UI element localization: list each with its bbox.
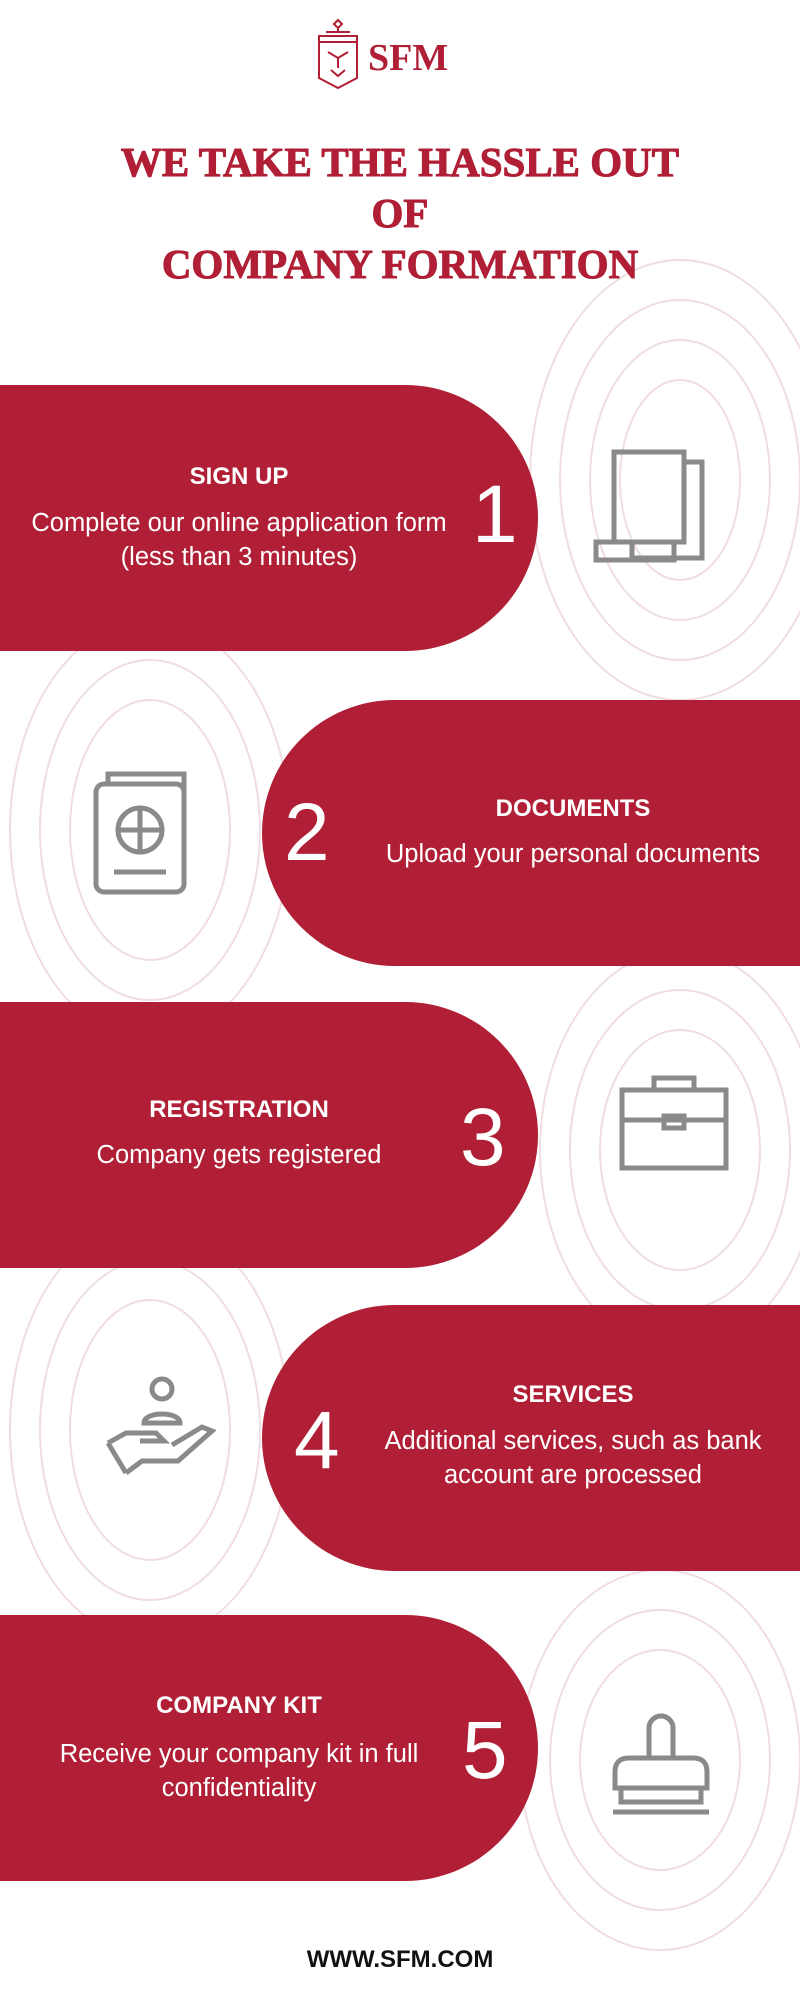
text: Upload your personal documents xyxy=(386,840,760,868)
text: Additional services, such as bank xyxy=(384,1427,762,1455)
text: Receive your company kit in full xyxy=(60,1740,418,1768)
text: confidentiality xyxy=(162,1774,316,1802)
text xyxy=(384,1427,762,1489)
number: 2 xyxy=(284,787,330,878)
icon: lion shield xyxy=(318,18,358,90)
logo xyxy=(318,18,448,90)
title xyxy=(120,139,679,287)
text: (less than 3 minutes) xyxy=(121,543,357,571)
heading: SIGN UP xyxy=(190,463,288,490)
logo text: SFM xyxy=(368,37,448,79)
panel: step 1 xyxy=(0,385,538,651)
title: WE TAKE THE HASSLE OUT xyxy=(121,139,679,185)
title: OF xyxy=(372,190,428,236)
panel: step 3 xyxy=(0,1002,538,1268)
number: 1 xyxy=(472,469,518,560)
icon: stamp xyxy=(612,1714,710,1814)
icon: hand with person xyxy=(106,1376,216,1475)
panel: step 2 xyxy=(262,700,800,966)
panel: step 4 xyxy=(262,1305,800,1571)
panel: step 5 xyxy=(0,1615,538,1881)
icon: briefcase xyxy=(620,1076,728,1170)
title: COMPANY FORMATION xyxy=(162,241,638,287)
text: Complete our online application form xyxy=(31,509,447,537)
number: 4 xyxy=(294,1395,340,1486)
heading: COMPANY KIT xyxy=(156,1692,322,1719)
icon: passport xyxy=(94,772,186,894)
heading: DOCUMENTS xyxy=(496,795,650,822)
number: 5 xyxy=(462,1705,508,1796)
icon: documents xyxy=(594,450,704,562)
heading: REGISTRATION xyxy=(149,1096,329,1123)
text: Company gets registered xyxy=(97,1141,381,1169)
text: account are processed xyxy=(444,1461,702,1489)
heading: SERVICES xyxy=(513,1381,633,1408)
footer url: WWW.SFM.COM xyxy=(307,1946,493,1973)
text xyxy=(60,1740,418,1802)
text xyxy=(31,509,447,571)
number: 3 xyxy=(460,1092,506,1183)
